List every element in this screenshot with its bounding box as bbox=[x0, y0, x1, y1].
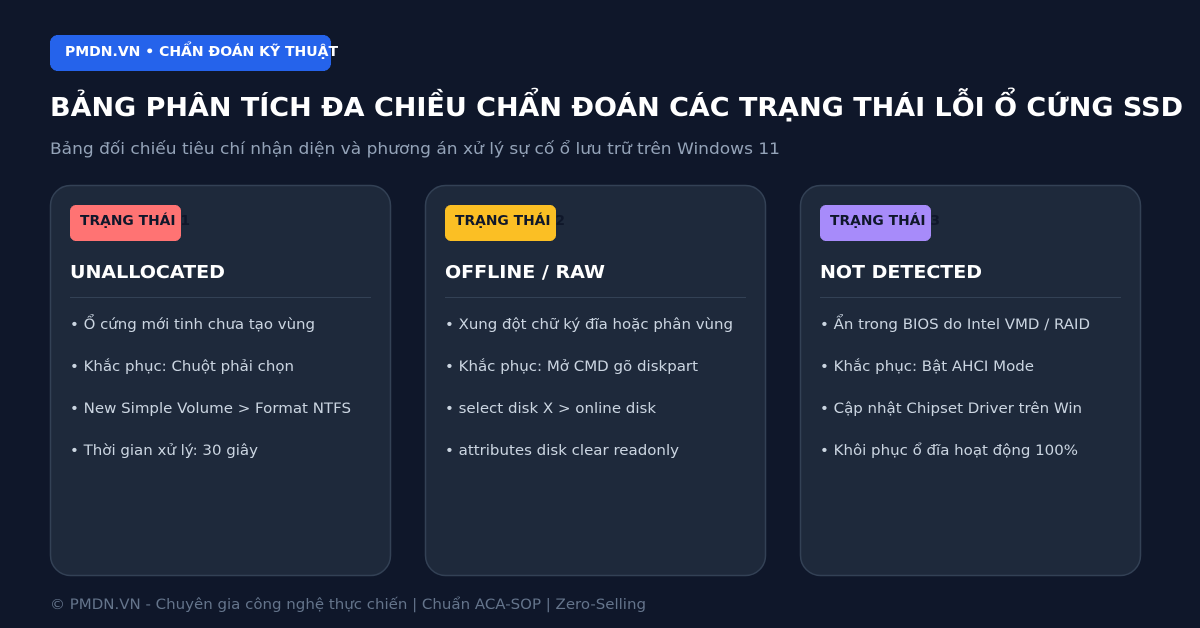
card list: • Xung đột chữ ký đĩa hoặc phân vùng bbox=[445, 317, 733, 333]
footer: © PMDN.VN - Chuyên gia công nghệ thực chiến | Chuẩn ACA-SOP | Zero-Selling bbox=[50, 596, 646, 613]
card list: • Cập nhật Chipset Driver trên Win bbox=[820, 401, 1082, 417]
card list bbox=[70, 314, 351, 459]
status badge 2: TRẠNG THÁI 2 bbox=[455, 213, 565, 229]
card list bbox=[445, 317, 733, 459]
panel: unallocated bbox=[50, 186, 390, 576]
card list: • Khắc phục: Chuột phải chọn bbox=[70, 358, 294, 375]
card list bbox=[820, 314, 1090, 459]
title: BẢNG PHÂN TÍCH ĐA CHIỀU CHẨN ĐOÁN CÁC TRẠNG THÁI LỖI Ổ CỨNG SSD bbox=[50, 85, 1183, 123]
status badge 2 bbox=[445, 205, 565, 241]
card list: • Khắc phục: Bật AHCI Mode bbox=[820, 358, 1034, 375]
card heading: NOT DETECTED bbox=[820, 262, 982, 283]
card list: • Thời gian xử lý: 30 giây bbox=[70, 443, 258, 459]
card heading: UNALLOCATED bbox=[70, 262, 225, 283]
status badge 1 bbox=[70, 205, 190, 241]
card list: • Khắc phục: Mở CMD gõ diskpart bbox=[445, 358, 699, 375]
card list: • attributes disk clear readonly bbox=[445, 443, 679, 459]
status badge 3: TRẠNG THÁI 3 bbox=[830, 213, 940, 229]
panel: offline raw bbox=[426, 186, 766, 576]
panel: not detected bbox=[800, 186, 1140, 576]
card list: • Ổ cứng mới tinh chưa tạo vùng bbox=[70, 314, 315, 333]
card list: • Khôi phục ổ đĩa hoạt động 100% bbox=[820, 442, 1078, 459]
card list: • select disk X > online disk bbox=[445, 401, 657, 417]
subtitle: Bảng đối chiếu tiêu chí nhận diện và phương án xử lý sự cố ổ lưu trữ trên Windows 11 bbox=[50, 139, 780, 158]
top badge bbox=[50, 35, 338, 71]
status badge 1: TRẠNG THÁI 1 bbox=[80, 213, 190, 229]
card heading: OFFLINE / RAW bbox=[445, 262, 605, 283]
card list: • Ẩn trong BIOS do Intel VMD / RAID bbox=[820, 314, 1090, 333]
top badge: PMDN.VN • CHẨN ĐOÁN KỸ THUẬT bbox=[65, 42, 338, 60]
status badge 3 bbox=[820, 205, 940, 241]
card list: • New Simple Volume > Format NTFS bbox=[70, 401, 351, 417]
